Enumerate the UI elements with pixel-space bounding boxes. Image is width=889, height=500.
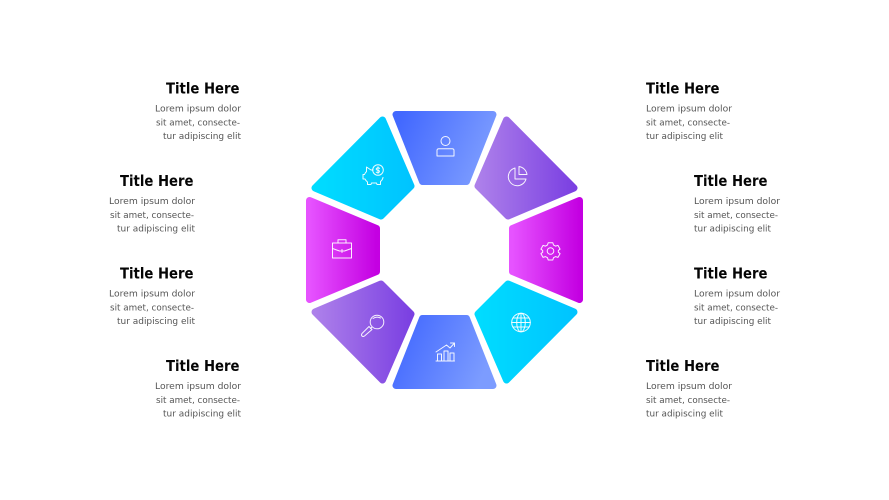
icon: gear: [541, 243, 560, 260]
body text: tur adipiscing elit: [646, 408, 723, 420]
heading: Title Here: [120, 264, 194, 282]
text block: left row 3: [109, 264, 195, 327]
body text: tur adipiscing elit: [117, 224, 195, 234]
icon: user: [437, 136, 454, 156]
body text: [646, 104, 732, 142]
heading: Title Here: [646, 80, 720, 98]
body text: sit amet, consecte-: [110, 302, 194, 314]
body text: tur adipiscing elit: [694, 224, 771, 234]
body text: [155, 381, 241, 420]
body text: tur adipiscing elit: [117, 316, 195, 327]
body text: sit amet, consecte-: [646, 118, 730, 128]
body text: [694, 288, 780, 327]
body text: sit amet, consecte-: [694, 302, 778, 314]
text block: right row 3: [694, 264, 780, 327]
text block: right row 4: [646, 357, 732, 420]
text block: right row 1: [646, 80, 732, 142]
segment: bottom blue with growth chart icon: [396, 318, 493, 386]
body text: Lorem ipsum dolor: [646, 104, 732, 114]
segment: left magenta with briefcase icon: [310, 200, 376, 300]
heading: Title Here: [166, 80, 240, 98]
segment: right magenta with gear icon: [512, 200, 580, 300]
body text: sit amet, consecte-: [646, 395, 730, 406]
segment: lower left purple with magnifier icon: [315, 284, 411, 380]
segment: top right purple with pie chart icon: [478, 120, 574, 216]
segment: lower right cyan with globe icon: [478, 284, 574, 380]
icon: growth chart: [436, 343, 454, 361]
text block: left row 2: [109, 172, 195, 234]
body text: tur adipiscing elit: [163, 131, 241, 142]
body text: [694, 196, 780, 234]
heading: Title Here: [694, 172, 768, 190]
heading: Title Here: [694, 264, 768, 282]
icon: magnifier: [362, 315, 384, 336]
body text: sit amet, consecte-: [694, 210, 778, 221]
body text: Lorem ipsum dolor: [155, 104, 241, 114]
body text: Lorem ipsum dolor: [109, 288, 195, 300]
icon: pie chart: [508, 166, 527, 186]
body text: tur adipiscing elit: [163, 408, 241, 420]
body text: sit amet, consecte-: [110, 210, 194, 221]
text block: left row 1: [155, 80, 241, 142]
icon: globe: [512, 313, 530, 332]
heading: Title Here: [646, 357, 720, 375]
text block: left row 4: [155, 357, 241, 420]
body text: [109, 288, 195, 327]
icon: piggy bank: [363, 165, 383, 184]
icon: briefcase: [332, 240, 352, 258]
body text: [155, 104, 241, 142]
body text: [646, 381, 732, 420]
body text: Lorem ipsum dolor: [694, 196, 780, 207]
body text: Lorem ipsum dolor: [109, 196, 195, 207]
body text: Lorem ipsum dolor: [646, 381, 732, 392]
heading: Title Here: [166, 357, 240, 375]
body text: [109, 196, 195, 234]
body text: sit amet, consecte-: [156, 395, 240, 406]
body text: Lorem ipsum dolor: [155, 381, 241, 392]
body text: Lorem ipsum dolor: [694, 288, 780, 300]
body text: tur adipiscing elit: [694, 316, 771, 327]
text block: right row 2: [694, 172, 780, 234]
segment: upper left cyan with piggy bank icon: [315, 120, 411, 216]
segment: top blue with user icon: [396, 114, 493, 182]
body text: tur adipiscing elit: [646, 131, 723, 142]
body text: sit amet, consecte-: [156, 118, 240, 128]
heading: Title Here: [120, 172, 194, 190]
